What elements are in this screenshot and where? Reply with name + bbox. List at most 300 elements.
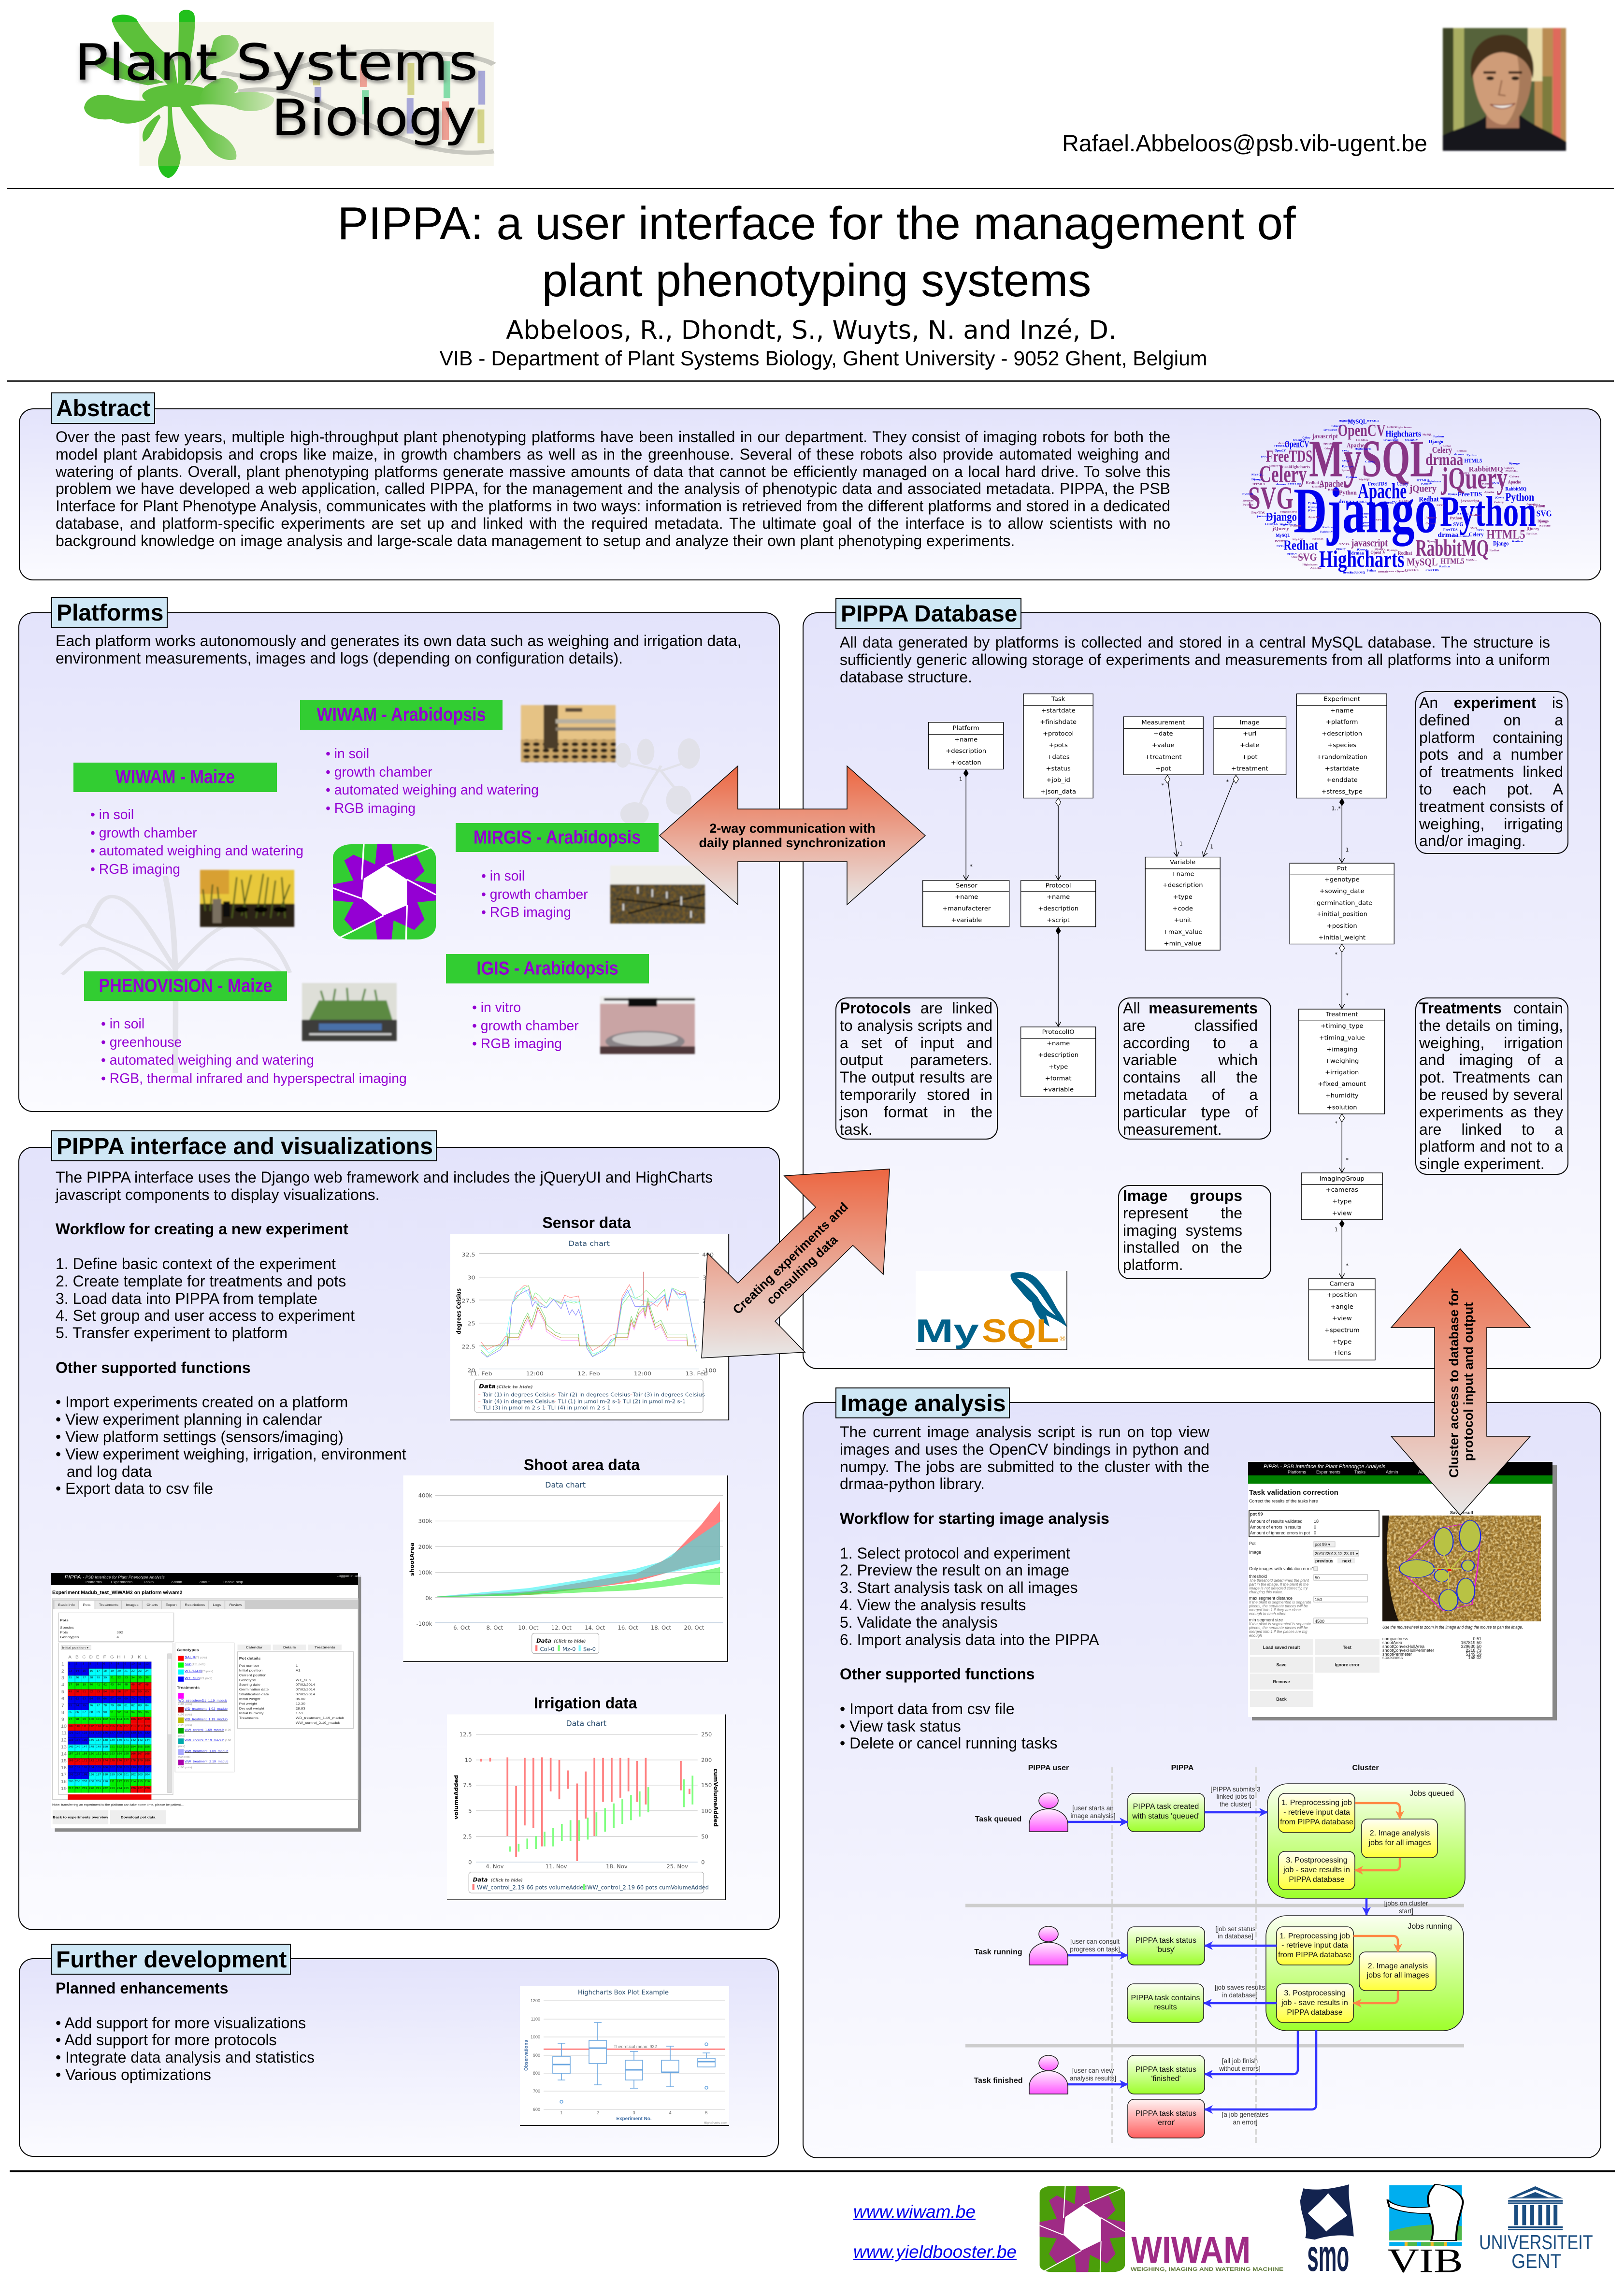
screenshot: task validation correction: compactness (1382, 1636, 1408, 1641)
chart: irrigation: Data chart (566, 1719, 606, 1728)
word cloud: Python (1440, 488, 1537, 535)
UML class diagram: +randomization (1317, 754, 1367, 761)
pot numbers: 104 (117, 1718, 122, 1721)
image analysis text: Other supported functions (840, 1665, 1035, 1683)
word cloud: FreeTDS (1443, 528, 1458, 532)
screenshot: experiment pots overview: Pot details (239, 1657, 261, 1661)
experiment text: platform containing (1419, 729, 1563, 746)
UML class diagram: +pots (1049, 742, 1068, 749)
pot numbers: 200 (117, 1774, 122, 1776)
UML class diagram: +name (1047, 1040, 1070, 1047)
chart: irrigation: 2.5 (463, 1833, 472, 1840)
word cloud: drmaa (1459, 535, 1470, 538)
chart: irrigation (447, 1714, 726, 1900)
screenshot: experiment pots overview: Images (126, 1603, 139, 1607)
word cloud: Redhat (1283, 538, 1318, 553)
word cloud: jQuery (1421, 482, 1432, 485)
screenshot: task validation correction: 20/10/2013 12:23:01 ▾ (1315, 1551, 1358, 1556)
pot numbers: 15 (83, 1670, 86, 1673)
pot numbers: 137 (96, 1739, 101, 1742)
chart: irrigation: 7.5 (463, 1782, 472, 1789)
screenshot: experiment pots overview: 1.51 (296, 1711, 303, 1715)
screenshot: experiment pots overview: C (82, 1655, 86, 1659)
word cloud: HTML5 (1265, 523, 1278, 526)
pot numbers: 221 (96, 1788, 101, 1790)
UML class diagram: +description (946, 748, 986, 755)
image analysis text: drmaa-python library. (840, 1475, 985, 1492)
measurements text: metadata of a (1123, 1086, 1258, 1103)
UML class diagram: +sowing_date (1320, 888, 1365, 895)
chart: sensor data: 11. Feb (470, 1371, 492, 1377)
pot numbers: 113 (96, 1725, 101, 1728)
word cloud: Redhat (1328, 489, 1339, 491)
pot numbers: 214 (130, 1780, 136, 1783)
screenshot: experiment pots overview: Treatments (177, 1686, 200, 1690)
screenshot: task validation correction: pieces, the separate pieces will be (1249, 1626, 1308, 1630)
pot numbers: 1 (69, 1663, 71, 1666)
UML class diagram: * (1346, 992, 1349, 998)
UML class diagram: +json_data (1040, 788, 1076, 795)
UML class diagram: Image (1240, 719, 1260, 726)
pot numbers: 95 (138, 1711, 142, 1714)
pot numbers: 17 (97, 1670, 100, 1673)
pot numbers: 147 (82, 1746, 87, 1748)
screenshot: experiment pots overview: Dry soil weight (239, 1706, 264, 1710)
word cloud: Django (1429, 439, 1443, 444)
UML class diagram: +position (1327, 923, 1357, 930)
word cloud: MySQL (1276, 534, 1291, 538)
pot numbers: 220 (89, 1788, 94, 1790)
UML class diagram: +pot (1242, 754, 1257, 761)
title (337, 198, 1296, 306)
pot numbers: 139 (110, 1739, 115, 1742)
pot numbers: 82 (131, 1704, 135, 1707)
pot numbers: 164 (117, 1753, 122, 1755)
screenshot: experiment pots overview: 1 (296, 1664, 298, 1668)
pot numbers: 217 (68, 1788, 73, 1790)
word cloud: FreeTDS (1288, 483, 1301, 485)
word cloud: HTML5 (1464, 458, 1482, 464)
screenshot: experiment pots overview: 12 (61, 1738, 67, 1743)
pot numbers: 66 (103, 1698, 107, 1700)
measurements text: measurement. (1123, 1121, 1222, 1138)
image analysis text: • View task status (840, 1718, 961, 1735)
affiliation: VIB - Department of Plant Systems Biology, Ghent University - 9052 Ghent, Belgium (440, 347, 1207, 370)
pot numbers: 202 (130, 1774, 136, 1776)
interface text and lists: • View experiment planning in calendar (56, 1411, 322, 1428)
screenshot: task validation correction: 4500 (1315, 1619, 1324, 1624)
WIWAM maize list: • automated weighing and watering (90, 843, 303, 858)
logo: VIB (1387, 2184, 1463, 2280)
word cloud: jQuery (1272, 526, 1289, 532)
screenshot: task validation correction: About (1418, 1470, 1430, 1474)
pot numbers: 37 (69, 1684, 72, 1686)
screenshot: experiment pots overview: (121 pots) (199, 1677, 212, 1680)
word cloud: FreeTDS (1266, 447, 1312, 466)
UML class diagram: +spectrum (1324, 1327, 1360, 1334)
screenshot: experiment pots overview: 11 (61, 1731, 67, 1736)
chart: irrigation: WW_control_2.19 66 pots volumeAdded (477, 1884, 587, 1891)
UML class diagram: +location (951, 759, 981, 766)
screenshot: task validation correction: Test (1343, 1645, 1351, 1650)
word cloud: SVG (1248, 480, 1293, 516)
word cloud: FreeTDS (1425, 569, 1439, 572)
UML class diagram: ProtocolIO (1042, 1029, 1075, 1036)
pot numbers: 100 (89, 1718, 94, 1721)
UML class diagram: +timing_type (1321, 1023, 1364, 1030)
pot numbers: 67 (110, 1698, 114, 1700)
word cloud: Highcharts (1338, 420, 1356, 422)
screenshot: experiment pots overview: pots) (178, 1735, 185, 1737)
flowchart: job states: PIPPA task contains (1131, 1994, 1200, 2002)
pot numbers: 117 (124, 1725, 129, 1728)
pot numbers: 149 (96, 1746, 101, 1748)
screenshot: task validation correction: shootConvexHullPerimeter (1382, 1648, 1434, 1653)
logo: WIWAM (1040, 2186, 1283, 2272)
flowchart: job states: [job saves results (1215, 1984, 1265, 1991)
WIWAM arabidopsis list: • growth chamber (326, 764, 432, 780)
UML class diagram: * (1335, 1120, 1338, 1127)
WIWAM arabidopsis list: • in soil (326, 746, 369, 761)
author photo (1441, 27, 1567, 152)
chart: shoot area: 400k (418, 1492, 432, 1499)
screenshot: experiment pots overview: A (68, 1655, 72, 1659)
screenshot: experiment pots overview: Germination date (239, 1688, 269, 1691)
panel: abstract (19, 408, 1601, 580)
panel: PIPPA interface (18, 1147, 780, 1930)
treatments text: Treatments contain (1419, 999, 1563, 1017)
pot numbers: 170 (75, 1760, 80, 1762)
interface text and lists: javascript components to display visualizations. (56, 1186, 380, 1203)
word cloud: OpenCV (1370, 549, 1386, 555)
UML class diagram: +fixed_amount (1318, 1081, 1366, 1088)
word cloud: jQuery (1409, 484, 1437, 494)
treatments text: be reused by several (1419, 1086, 1563, 1103)
abstract text: model plant Arabidopsis and crops like maize, in growth chambers as well as in the greenhouse. Several of these robots also provide automated weighing and (56, 446, 1170, 463)
word cloud: MySQL (1348, 419, 1367, 425)
experiment text: pots and a number (1419, 746, 1563, 763)
panel: further development (19, 1958, 779, 2157)
word cloud: MySQL (1359, 478, 1371, 481)
protocols text: a set of input and (840, 1034, 992, 1052)
flowchart: job states: start] (1399, 1907, 1413, 1915)
chart: shoot area (403, 1475, 728, 1661)
pot numbers: 136 (89, 1739, 94, 1742)
interface text and lists: • Import experiments created on a platform (56, 1393, 348, 1411)
UML class diagram: +initial_weight (1318, 934, 1365, 941)
word cloud: FreeTDS (1368, 481, 1387, 487)
chart: shoot area: shootArea (409, 1543, 416, 1576)
UML class diagram (923, 694, 1394, 1360)
chart: irrigation: 0 (701, 1859, 704, 1866)
pot numbers: 173 (96, 1760, 101, 1762)
UML class diagram: +min_value (1164, 940, 1202, 948)
word cloud: Redhat (1482, 482, 1494, 485)
chart: box plot: 1000 (531, 2035, 540, 2039)
screenshot: task validation correction: enough (1249, 1633, 1262, 1638)
chart group: shoot area and irrigation (403, 1475, 728, 1900)
UML class diagram: +date (1240, 742, 1260, 749)
pot numbers: 78 (103, 1704, 107, 1707)
word cloud: drmaa (1351, 551, 1364, 556)
word cloud: Apache (1347, 442, 1365, 449)
screenshot: task validation correction: shootPerimeter (1382, 1652, 1412, 1657)
pot numbers: 51 (83, 1690, 86, 1693)
screenshot: task validation correction: If the plant is segmented is separate (1249, 1600, 1311, 1604)
UML class diagram: Variable (1170, 859, 1195, 866)
screenshot: experiment pots overview: 392 (116, 1630, 123, 1634)
logo: SMO (1300, 2184, 1354, 2281)
pot numbers: 187 (110, 1766, 115, 1769)
flowchart: job states: [PIPPA submits 3 (1210, 1786, 1261, 1793)
pot numbers: 84 (145, 1704, 149, 1707)
flowchart: job states: [user can view (1072, 2067, 1114, 2074)
image analysis text: The current image analysis script is run on top view (840, 1423, 1209, 1441)
pot numbers: 176 (117, 1760, 122, 1762)
pot numbers: 201 (124, 1774, 129, 1776)
pot numbers: 203 (138, 1774, 143, 1776)
screenshot: experiment pots overview: 5 (61, 1690, 64, 1694)
word cloud: Celery (1425, 522, 1436, 525)
screenshot: experiment pots overview: Treatments (239, 1716, 259, 1720)
panel: PIPPA database (803, 612, 1601, 1369)
screenshot: task validation correction: enough to each other. (1249, 1612, 1287, 1616)
planned enhancements: Planned enhancements (56, 1979, 228, 1997)
label: irrigation data: Irrigation data (534, 1694, 637, 1712)
screenshot: experiment pots overview: 3 (61, 1676, 64, 1681)
pot numbers: 7 (110, 1663, 112, 1666)
screenshot: experiment pots overview: I (124, 1655, 125, 1659)
screenshot: experiment pots overview: WW_treatment_2.19_madub (185, 1760, 228, 1763)
pot numbers: 71 (138, 1698, 142, 1700)
interface text and lists: and log data (67, 1463, 152, 1480)
word cloud: Python (1505, 491, 1534, 504)
interface text and lists: • Export data to csv file (56, 1480, 213, 1497)
UML class diagram: * (1161, 782, 1164, 788)
treatments text: pot. Treatments can (1419, 1069, 1563, 1086)
UML class diagram: Measurement (1141, 719, 1185, 726)
flowchart: job states: with status 'queued' (1132, 1812, 1200, 1820)
pot numbers: 74 (75, 1704, 79, 1707)
flowchart: job states: job - save results in (1281, 1999, 1348, 2007)
UML class diagram: +startdate (1325, 765, 1359, 773)
chart: sensor data: -100 (703, 1367, 717, 1373)
UML class diagram: Sensor (956, 882, 977, 890)
pot numbers: 169 (68, 1760, 73, 1762)
screenshot: task validation correction: pot 99 ▾ (1315, 1542, 1331, 1547)
UML class diagram: +treatment (1145, 754, 1182, 761)
pot numbers: 26 (75, 1676, 79, 1679)
screenshot: experiment pots overview: 85.00 (296, 1697, 305, 1701)
pot numbers: 138 (103, 1739, 108, 1742)
pot numbers: 12 (145, 1663, 149, 1666)
pot numbers: 33 (124, 1676, 128, 1679)
word cloud: Apache (1310, 567, 1322, 570)
flowchart: job states: 2. Image analysis (1370, 1829, 1430, 1837)
pot numbers: 28 (89, 1676, 93, 1679)
word cloud: FreeTDS (1251, 511, 1265, 515)
UML class diagram: +script (1047, 917, 1070, 924)
pot numbers: 194 (75, 1774, 81, 1776)
screenshot: task validation correction: Remove (1273, 1679, 1290, 1684)
flowchart: job states: Task finished (974, 2077, 1023, 2085)
word cloud: javascript (1383, 439, 1399, 442)
word cloud: drmaa (1276, 483, 1286, 486)
flowchart: job states: the cluster] (1220, 1801, 1251, 1808)
word cloud: Apache (1308, 516, 1320, 519)
WIWAM maize list: • RGB imaging (90, 861, 180, 877)
IGIS list (472, 999, 579, 1051)
chart: box plot: Highcharts Box Plot Example (578, 1989, 669, 1996)
pot numbers: 115 (110, 1725, 115, 1728)
pot numbers: 112 (89, 1725, 94, 1728)
treatments text (1419, 999, 1564, 1172)
screenshot: experiment pots overview: Export (165, 1603, 177, 1607)
callout: measurements (1118, 997, 1271, 1140)
WIWAM arabidopsis list: • RGB imaging (326, 800, 416, 816)
flowchart: job states: jobs for all images (1366, 1971, 1429, 1979)
pot numbers: 32 (117, 1676, 121, 1679)
image analysis text: 3. Start analysis task on all images (840, 1579, 1078, 1596)
image analysis text (840, 1424, 1209, 1752)
image analysis text: 2. Preview the result on an image (840, 1561, 1069, 1579)
word cloud: RabbitMQ (1320, 531, 1337, 534)
word cloud: drmaa (1343, 571, 1353, 574)
word cloud: Celery (1494, 501, 1504, 504)
flowchart: job states: an error] (1233, 2119, 1258, 2126)
UML class diagram: +startdate (1041, 708, 1076, 715)
word cloud: Django (1493, 540, 1509, 547)
IGIS label: IGIS - Arabidopsis (476, 958, 618, 979)
screenshot: task validation correction: changing this value. (1249, 1590, 1283, 1594)
pot numbers: 99 (83, 1718, 86, 1721)
flowchart: job states: PIPPA task created (1133, 1803, 1199, 1811)
word cloud: Python (1367, 568, 1376, 572)
WIWAM maize list (90, 807, 303, 877)
word cloud: MySQL (1251, 473, 1264, 476)
screenshot: experiment pots overview: L (145, 1655, 147, 1659)
screenshot: task validation correction: The threshold determines the plant (1249, 1578, 1309, 1583)
pot numbers: 165 (124, 1753, 129, 1755)
UML class diagram: +solution (1327, 1104, 1357, 1111)
pot numbers: 58 (131, 1690, 135, 1693)
word cloud: Redhat (1312, 537, 1324, 540)
screenshot: task validation correction: Amount of ignored errors in pot (1250, 1531, 1310, 1535)
icon: WIWAM logo (333, 844, 436, 939)
word cloud: OpenCV (1285, 439, 1309, 449)
UML class diagram: +url (1243, 730, 1256, 737)
image analysis text: • Import data from csv file (840, 1700, 1015, 1718)
screenshot: task validation correction: Task validation correction (1249, 1488, 1338, 1497)
screenshot: task validation correction: Only images with validation error? (1249, 1566, 1315, 1571)
interface text and lists: 1. Define basic context of the experiment (56, 1255, 336, 1272)
photo: WIWAM arabidopsis robot (521, 705, 616, 762)
screenshot: experiment pots overview: Back to experiments overview (53, 1815, 108, 1819)
pot numbers: 166 (130, 1753, 136, 1755)
callout: experiment (1415, 691, 1568, 854)
word cloud: Celery (1259, 461, 1307, 488)
screenshot: task validation correction: previous (1315, 1559, 1334, 1563)
flowchart: job states: 3. Postprocessing (1286, 1856, 1348, 1864)
screenshot: experiment pots overview: 9 (61, 1718, 64, 1722)
word cloud: SVG (1342, 449, 1349, 452)
pot numbers: 97 (69, 1718, 72, 1721)
flowchart: job states: - retrieve input data (1281, 1941, 1348, 1950)
pot numbers: 42 (103, 1684, 107, 1686)
pot numbers: 47 (138, 1684, 142, 1686)
pot numbers: 204 (145, 1774, 150, 1776)
word cloud: Redhat (1306, 480, 1319, 485)
word cloud: Redhat (1398, 550, 1412, 556)
treatments text: platform and not to a (1419, 1138, 1563, 1155)
flowchart: job states: linked jobs to (1217, 1793, 1254, 1800)
pot numbers: 213 (124, 1780, 129, 1783)
word cloud: drmaa (1425, 450, 1463, 469)
screenshot: task validation correction: merged into 1 if they are close (1249, 1608, 1301, 1612)
screenshot: experiment pots overview: WW_treatment_1.69_madub (185, 1749, 228, 1753)
PHENOVISION list: • RGB, thermal infrared and hyperspectral imaging (101, 1070, 407, 1086)
UML class diagram: 1 (1335, 1227, 1338, 1233)
screenshot: task validation correction: Amount of results validated (1250, 1519, 1303, 1524)
arrow: cluster access (1391, 1249, 1530, 1515)
word cloud: HTML5 (1440, 557, 1464, 566)
flowchart: job states: Task running (974, 1948, 1022, 1956)
screenshot: experiment pots overview: Charts (146, 1603, 158, 1607)
word cloud: javascript (1351, 537, 1388, 549)
pot numbers: 142 (130, 1739, 136, 1742)
pot numbers: 6 (103, 1663, 105, 1666)
pot numbers: 122 (75, 1732, 80, 1734)
chart: box plot: 2 (596, 2110, 599, 2115)
word cloud: Celery (1365, 461, 1376, 463)
UML class diagram: +code (1172, 905, 1193, 912)
arrow: cluster access: protocol input and output (1461, 1302, 1476, 1461)
database intro (840, 634, 1550, 686)
chart: sensor data: 200 (703, 1298, 714, 1304)
pot numbers: 11 (138, 1663, 142, 1666)
pot numbers: 114 (103, 1725, 108, 1728)
chart: irrigation: 200 (701, 1757, 712, 1763)
IGIS list: • in vitro (472, 999, 521, 1015)
experiment text: treatment consists of (1419, 798, 1563, 815)
pot numbers: 160 (89, 1753, 94, 1755)
chart: shoot area: 300k (418, 1518, 432, 1525)
pot numbers: 27 (83, 1676, 86, 1679)
pot numbers: 46 (131, 1684, 135, 1686)
screenshot: experiment pots overview: (106 pots) (178, 1766, 192, 1769)
pot numbers: 126 (103, 1732, 108, 1734)
flowchart: job states: PIPPA (1171, 1764, 1194, 1772)
flowchart: job states: Jobs running (1408, 1922, 1452, 1931)
word cloud: drmaa (1437, 531, 1459, 539)
chart: sensor data: 100 (703, 1320, 714, 1327)
WIWAM maize label: WIWAM - Maize (115, 766, 235, 788)
pot numbers: 111 (82, 1725, 86, 1728)
pot numbers: 57 (124, 1690, 128, 1693)
screenshot: experiment pots overview: Sun (185, 1662, 191, 1666)
protocols text: task. (840, 1121, 873, 1138)
flowchart: job states: 'error' (1156, 2119, 1176, 2127)
chart: shoot area: -100k (416, 1620, 432, 1627)
callout: protocols (835, 997, 998, 1140)
word cloud: OpenCV (1291, 556, 1305, 559)
callout: treatments (1415, 997, 1568, 1175)
word cloud: javascript (1323, 429, 1337, 431)
chart: shoot area: 12. Oct (551, 1624, 572, 1631)
photo: PHENOVISION (302, 983, 397, 1041)
pot numbers: 54 (103, 1690, 107, 1693)
pot numbers: 45 (124, 1684, 128, 1686)
